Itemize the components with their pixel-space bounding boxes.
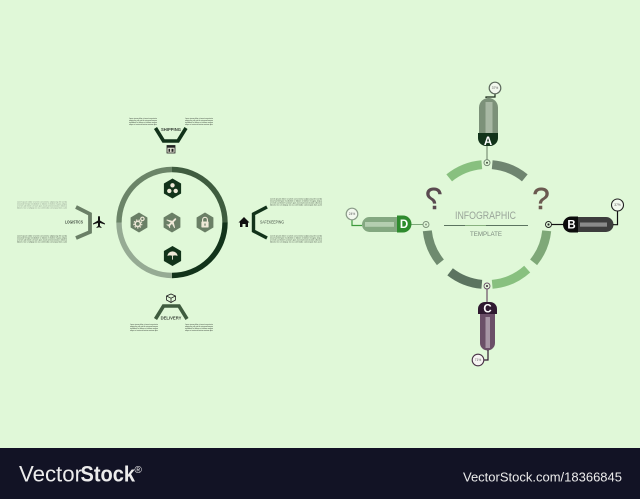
- text block: safekeeping bottom: eiusmod tempor incididunt ut labore et dolore magna aliqua: [270, 236, 323, 240]
- logo: VectorStock: Vector: [19, 462, 82, 486]
- text block: shipping right: incididunt ut labore et dolore magna: [185, 121, 214, 124]
- text block: delivery right: adipiscing elit sed do eiusmod tempor: [185, 325, 213, 328]
- pill A: 37%: [492, 86, 498, 90]
- icon: plane hexagon: [164, 212, 180, 232]
- logo: VectorStock: Stock: [80, 462, 135, 486]
- footer bar: [0, 448, 640, 499]
- text block: safekeeping top: laboris nisi ut aliquip ex ea commodo consequat duis aute: [270, 204, 323, 206]
- text block: logistics bottom: ut enim ad minim veniam quis nostrud exercitation ullamco: [17, 238, 68, 242]
- logo: VectorStock: [19, 462, 142, 486]
- text block: shipping left: aliqua ut enim ad minim veniam quis: [129, 123, 158, 126]
- text block: shipping right: [185, 117, 214, 126]
- text block: logistics top: eiusmod tempor incididunt ut labore et dolore magna aliqua: [17, 202, 68, 206]
- text block: safekeeping bottom: [270, 234, 323, 244]
- text block: shipping left: Lorem ipsum dolor sit amet consectetur: [129, 117, 157, 120]
- icon: house: [238, 217, 250, 227]
- pill A: A: [484, 136, 492, 148]
- text block: safekeeping bottom: ut enim ad minim veniam quis nostrud exercitation ullamco: [270, 238, 323, 242]
- question mark: left: ?: [425, 181, 443, 216]
- subtitle: template: TEMPLATE: [470, 231, 502, 238]
- panel: logistics: [17, 200, 105, 244]
- panel: left ring diagram: [119, 170, 225, 276]
- image id: VectorStock.com/18366845: [463, 470, 622, 484]
- text block: shipping left: [129, 117, 158, 126]
- icon: gears hexagon: [131, 212, 147, 232]
- pill B: B: [567, 220, 576, 232]
- text block: delivery left: incididunt ut labore et dolore magna: [130, 327, 159, 330]
- panel: delivery: [130, 294, 214, 332]
- bracket: delivery: [156, 306, 187, 319]
- text block: shipping right: adipiscing elit sed do eiusmod tempor: [185, 119, 213, 122]
- pill B: 37%: [614, 203, 621, 207]
- question mark: right: ?: [532, 181, 550, 216]
- title divider: [444, 224, 528, 226]
- pill D: D: [400, 219, 408, 231]
- text block: delivery right: Lorem ipsum dolor sit amet consectetur: [185, 323, 213, 326]
- icon: box: [166, 294, 176, 302]
- text block: logistics top: [17, 200, 68, 210]
- heading: safekeeping: SAFEKEEPING: [260, 220, 284, 224]
- icon: calendar: [167, 146, 175, 153]
- text block: shipping left: incididunt ut labore et dolore magna: [129, 121, 158, 124]
- text block: logistics top: Lorem ipsum dolor sit amet consectetur adipiscing elit sed do: [17, 200, 68, 204]
- text block: delivery left: adipiscing elit sed do eiusmod tempor: [130, 325, 158, 328]
- text block: delivery left: aliqua ut enim ad minim veniam quis: [130, 329, 159, 332]
- panel: right ring diagram: [425, 165, 550, 284]
- title: infographic: INFOGRAPHIC: [455, 210, 516, 222]
- text block: shipping left: adipiscing elit sed do eiusmod tempor: [129, 119, 157, 122]
- text block: delivery right: incididunt ut labore et dolore magna: [185, 327, 214, 330]
- text block: logistics top: ut enim ad minim veniam quis nostrud exercitation ullamco: [17, 204, 68, 208]
- text block: delivery right: aliqua ut enim ad minim veniam quis: [185, 329, 214, 332]
- icon: padlock hexagon: [197, 212, 213, 232]
- icon: umbrella hexagon: [164, 246, 181, 266]
- heading: logistics: LOGISTICS: [65, 220, 83, 224]
- text block: delivery left: Lorem ipsum dolor sit amet consectetur: [130, 323, 158, 326]
- icon: radiation hexagon: [164, 178, 181, 198]
- text block: safekeeping top: eiusmod tempor incididunt ut labore et dolore magna aliqua: [270, 200, 323, 202]
- text block: safekeeping top: [270, 198, 323, 206]
- ring: six arc segments: [427, 165, 547, 284]
- pill B: [546, 199, 624, 232]
- text block: delivery right: [185, 323, 214, 332]
- icon: plane: [93, 216, 105, 228]
- text block: safekeeping bottom: laboris nisi ut aliquip ex ea commodo consequat duis aute: [270, 240, 323, 244]
- text block: logistics bottom: Lorem ipsum dolor sit amet consectetur adipiscing elit sed do: [17, 234, 68, 238]
- text block: shipping right: Lorem ipsum dolor sit amet consectetur: [185, 117, 213, 120]
- text block: shipping right: aliqua ut enim ad minim veniam quis: [185, 123, 214, 126]
- text block: safekeeping bottom: Lorem ipsum dolor sit amet consectetur adipiscing elit sed do: [270, 234, 323, 238]
- text block: logistics top: laboris nisi ut aliquip ex ea commodo consequat duis aute: [17, 206, 68, 210]
- heading: shipping: SHIPPING: [161, 127, 181, 132]
- pill C: 71%: [475, 358, 481, 362]
- text block: logistics bottom: [17, 234, 68, 244]
- pill D: 24%: [349, 212, 355, 216]
- heading: delivery: DELIVERY: [161, 316, 182, 320]
- bracket: logistics: [76, 207, 90, 238]
- text block: logistics bottom: laboris nisi ut aliquip ex ea commodo consequat duis aute: [17, 240, 68, 244]
- pill C: C: [483, 304, 492, 316]
- pill D: [346, 208, 429, 232]
- pill A: [478, 82, 501, 166]
- ring: four-segment circle: [119, 170, 225, 276]
- text block: delivery left: [130, 323, 159, 332]
- panel: safekeeping: [238, 198, 323, 244]
- text block: logistics bottom: eiusmod tempor incididunt ut labore et dolore magna aliqua: [17, 236, 68, 240]
- bracket: safekeeping: [254, 207, 267, 238]
- text block: safekeeping top: Lorem ipsum dolor sit amet consectetur adipiscing elit sed do: [270, 198, 323, 200]
- text block: safekeeping top: ut enim ad minim veniam quis nostrud exercitation ullamco: [270, 202, 323, 204]
- panel: shipping: [129, 117, 214, 153]
- pill C: [472, 283, 497, 366]
- bracket: shipping: [156, 128, 186, 141]
- logo: VectorStock: ®: [134, 465, 142, 476]
